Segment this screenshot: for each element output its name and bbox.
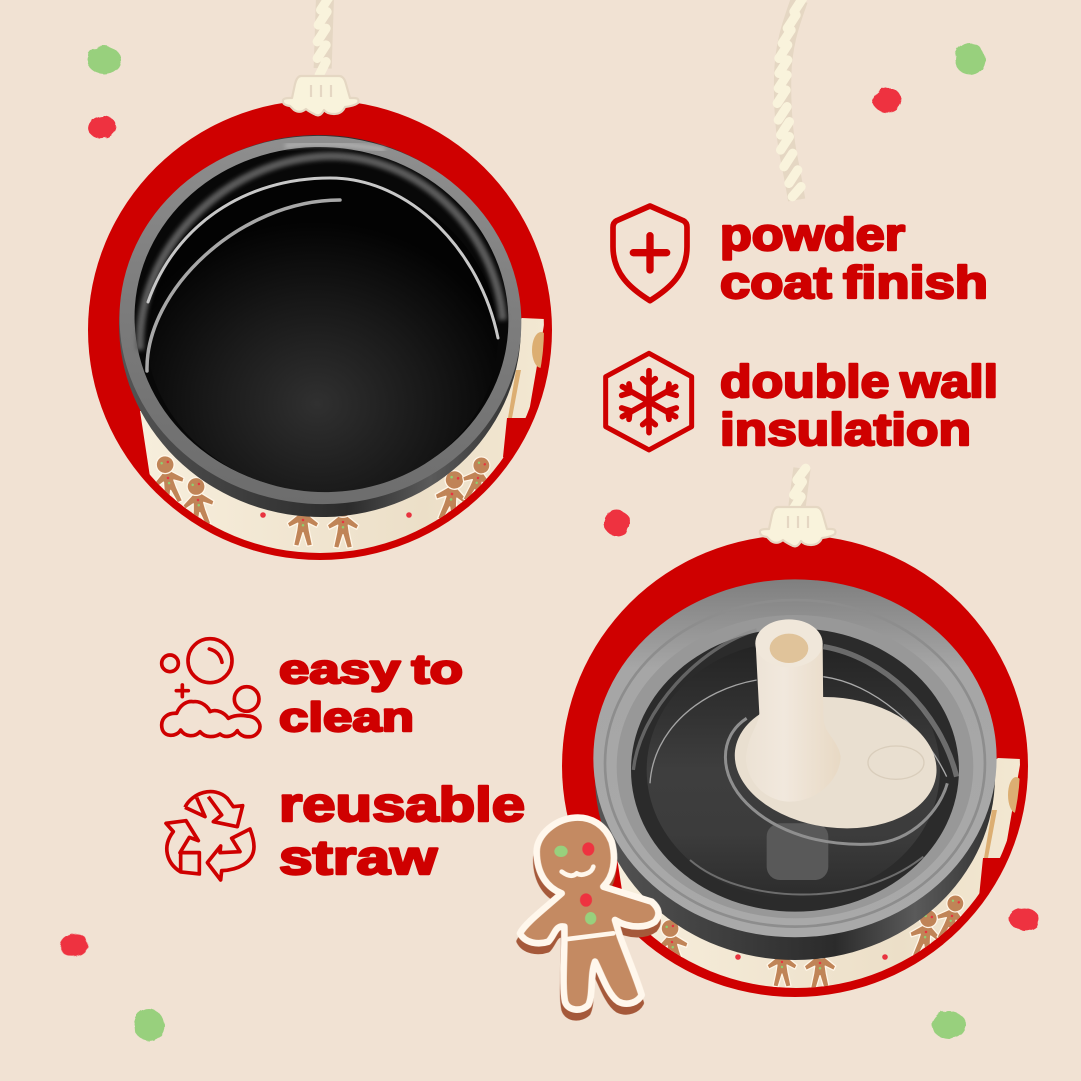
cookie body [520, 818, 658, 1010]
feature: reusable straw: straw [279, 832, 438, 885]
inner wall sheen [140, 156, 503, 350]
cookie shadow [519, 826, 658, 1018]
lid reflections [633, 630, 957, 895]
red bauble [88, 100, 552, 560]
lid [593, 579, 997, 960]
feature: easy to clean: clean [279, 694, 414, 740]
tumbler rim [106, 121, 534, 531]
dark lower rim [595, 593, 995, 960]
cream tumbler band [616, 758, 1024, 1010]
gingerbread man [519, 818, 658, 1018]
rope [317, 0, 329, 75]
candy buttons [554, 846, 568, 857]
inner wall reflections [148, 178, 498, 338]
feature: powder coat finish [613, 206, 988, 308]
cream disc [727, 686, 944, 840]
straw [746, 619, 841, 802]
text: double wall [720, 356, 998, 407]
text: powder [720, 209, 905, 260]
icon: shield plus [613, 206, 687, 301]
feature: easy to clean [162, 639, 463, 740]
smile icing [562, 867, 593, 876]
inner well [135, 166, 509, 504]
icon: snowflake hexagon [606, 353, 692, 450]
icon: recycle arrows [166, 792, 254, 880]
icon: bubbles [162, 639, 260, 737]
red bauble [562, 535, 1028, 997]
clear seal ring [725, 718, 947, 844]
rope [794, 468, 806, 508]
ornament cap [760, 507, 836, 546]
long rope [777, 0, 803, 200]
cream tumbler band [140, 318, 550, 570]
lid outer ring [593, 579, 997, 937]
text: easy to [279, 646, 463, 692]
rim highlight [285, 144, 385, 150]
feature: reusable straw [166, 779, 525, 885]
lid inner well [631, 628, 959, 912]
ornament 2: lid with straw [562, 468, 1028, 1010]
feature: double wall insulation [606, 353, 998, 455]
ornament 1: open tumbler [88, 0, 552, 570]
feature: double wall insulation: insulation [720, 404, 971, 455]
belt icing [568, 933, 613, 939]
feature: powder coat finish: coat finish [720, 257, 988, 308]
straw shadow [767, 823, 828, 880]
ornament cap [283, 76, 358, 115]
text: reusable [279, 779, 525, 832]
